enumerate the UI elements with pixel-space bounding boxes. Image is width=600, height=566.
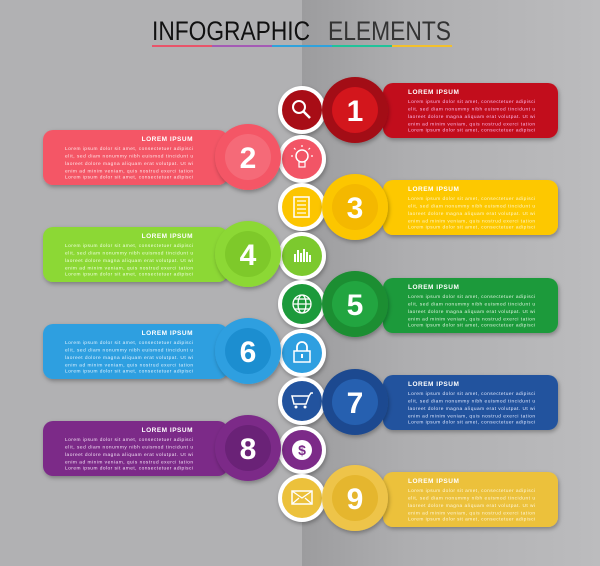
title: ELEMENTS	[328, 16, 451, 46]
number 8: 8	[240, 433, 256, 466]
number 3	[322, 174, 388, 240]
panel 2: LOREM IPSUM	[142, 136, 193, 143]
icon: bar chart	[278, 232, 326, 280]
title	[152, 16, 452, 47]
icon: cart	[278, 377, 326, 425]
panel 7: Lorem ipsum dolor sit amet, consectetuer adipisci	[408, 420, 535, 426]
panel 8: Lorem ipsum dolor sit amet, consectetuer adipisci	[65, 466, 193, 472]
panel 4: elit, sed diam nonummy nibh euismod tincidunt u	[65, 250, 193, 256]
panel 7: LOREM IPSUM	[408, 381, 459, 388]
panel 4: Lorem ipsum dolor sit amet, consectetuer adipisci	[65, 272, 193, 278]
panel 6	[43, 324, 228, 379]
panel 9: Lorem ipsum dolor sit amet, consectetuer adipisci	[408, 488, 535, 494]
panel 5: Lorem ipsum dolor sit amet, consectetuer adipisci	[408, 322, 535, 328]
panel 7: Lorem ipsum dolor sit amet, consectetuer adipisci	[408, 391, 535, 397]
panel 3: Lorem ipsum dolor sit amet, consectetuer adipisci	[408, 224, 535, 230]
panel 2: Lorem ipsum dolor sit amet, consectetuer adipisci	[65, 174, 193, 180]
panel 8: laoreet dolore magna aliquam erat volutpat. Ut wi	[65, 452, 193, 458]
panel 5	[383, 278, 558, 333]
icon: globe	[278, 280, 326, 328]
icon: magnifier	[278, 86, 326, 134]
number 3: 3	[347, 192, 363, 225]
number 4	[215, 221, 281, 287]
panel 6: Lorem ipsum dolor sit amet, consectetuer adipisci	[65, 340, 193, 346]
number 7: 7	[347, 387, 363, 420]
panel 9: enim ad minim veniam, quis nostrud exerci tation	[408, 510, 535, 516]
number 9: 9	[347, 483, 363, 516]
panel 4	[43, 227, 228, 282]
number 2	[215, 124, 281, 190]
icon: light bulb	[278, 135, 326, 183]
panel 4: laoreet dolore magna aliquam erat volutpat. Ut wi	[65, 258, 193, 264]
panel 3: elit, sed diam nonummy nibh euismod tincidunt u	[408, 204, 535, 210]
number 6: 6	[240, 336, 256, 369]
number circles	[215, 77, 388, 531]
icon: checklist	[278, 183, 326, 231]
panel 2: elit, sed diam nonummy nibh euismod tincidunt u	[65, 154, 193, 160]
panel 3: enim ad minim veniam, quis nostrud exerci tation	[408, 218, 535, 224]
panel 6: enim ad minim veniam, quis nostrud exerci tation	[65, 362, 193, 368]
panel 7: laoreet dolore magna aliquam erat volutpat. Ut wi	[408, 406, 535, 412]
number 8	[215, 415, 281, 481]
panel 8: enim ad minim veniam, quis nostrud exerci tation	[65, 460, 193, 466]
panel 7: enim ad minim veniam, quis nostrud exerci tation	[408, 414, 535, 420]
number 9	[322, 465, 388, 531]
panel 4: LOREM IPSUM	[142, 233, 193, 240]
panel 2	[43, 130, 228, 185]
number 5	[322, 271, 388, 337]
panel 6: LOREM IPSUM	[142, 330, 193, 337]
panel 7: elit, sed diam nonummy nibh euismod tincidunt u	[408, 398, 535, 404]
panel 6: Lorem ipsum dolor sit amet, consectetuer adipisci	[65, 368, 193, 374]
panel 7	[383, 375, 558, 430]
panel 5: LOREM IPSUM	[408, 284, 459, 291]
number 5: 5	[347, 289, 363, 322]
number 4: 4	[240, 239, 257, 272]
panel 5: elit, sed diam nonummy nibh euismod tincidunt u	[408, 302, 535, 308]
panel 1	[383, 83, 558, 138]
panel 2: laoreet dolore magna aliquam erat volutpat. Ut wi	[65, 161, 193, 167]
panel 1: laoreet dolore magna aliquam erat volutpat. Ut wi	[408, 114, 535, 120]
panel 9: LOREM IPSUM	[408, 478, 459, 485]
panel 2: enim ad minim veniam, quis nostrud exerci tation	[65, 168, 193, 174]
panel 8: Lorem ipsum dolor sit amet, consectetuer adipisci	[65, 437, 193, 443]
number 2: 2	[240, 142, 256, 175]
number 1: 1	[347, 95, 363, 128]
panel 3: Lorem ipsum dolor sit amet, consectetuer adipisci	[408, 196, 535, 202]
panel 4: enim ad minim veniam, quis nostrud exerci tation	[65, 266, 193, 272]
panel 3: laoreet dolore magna aliquam erat volutpat. Ut wi	[408, 211, 535, 217]
panel 9: elit, sed diam nonummy nibh euismod tincidunt u	[408, 496, 535, 502]
panel 9	[383, 472, 558, 527]
panel 1: enim ad minim veniam, quis nostrud exerci tation	[408, 122, 535, 128]
panel 1: LOREM IPSUM	[408, 89, 459, 96]
panel 8: elit, sed diam nonummy nibh euismod tincidunt u	[65, 444, 193, 450]
panel 5: Lorem ipsum dolor sit amet, consectetuer adipisci	[408, 294, 535, 300]
panel 9: laoreet dolore magna aliquam erat volutpat. Ut wi	[408, 503, 535, 509]
panel 1: elit, sed diam nonummy nibh euismod tincidunt u	[408, 106, 535, 112]
panel 2: Lorem ipsum dolor sit amet, consectetuer adipisci	[65, 146, 193, 152]
panel 8	[43, 421, 228, 476]
icon: envelope	[278, 474, 326, 522]
panel 3: LOREM IPSUM	[408, 186, 459, 193]
panel 4: Lorem ipsum dolor sit amet, consectetuer adipisci	[65, 243, 193, 249]
icon: dollar	[278, 426, 326, 474]
panel 6: elit, sed diam nonummy nibh euismod tincidunt u	[65, 348, 193, 354]
icon: dollar: $	[298, 442, 306, 458]
panel 1: Lorem ipsum dolor sit amet, consectetuer adipisci	[408, 99, 535, 105]
panel 1: Lorem ipsum dolor sit amet, consectetuer adipisci	[408, 128, 535, 134]
number 1	[322, 77, 388, 143]
icon column	[278, 86, 326, 522]
panel 6: laoreet dolore magna aliquam erat volutpat. Ut wi	[65, 355, 193, 361]
panel 5: laoreet dolore magna aliquam erat volutpat. Ut wi	[408, 309, 535, 315]
panel 3	[383, 180, 558, 235]
panel 8: LOREM IPSUM	[142, 427, 193, 434]
number 6	[215, 318, 281, 384]
panel 9: Lorem ipsum dolor sit amet, consectetuer adipisci	[408, 516, 535, 522]
icon: lock	[278, 329, 326, 377]
number 7	[322, 369, 388, 435]
panel 5: enim ad minim veniam, quis nostrud exerci tation	[408, 316, 535, 322]
title: INFOGRAPHIC	[152, 16, 310, 46]
